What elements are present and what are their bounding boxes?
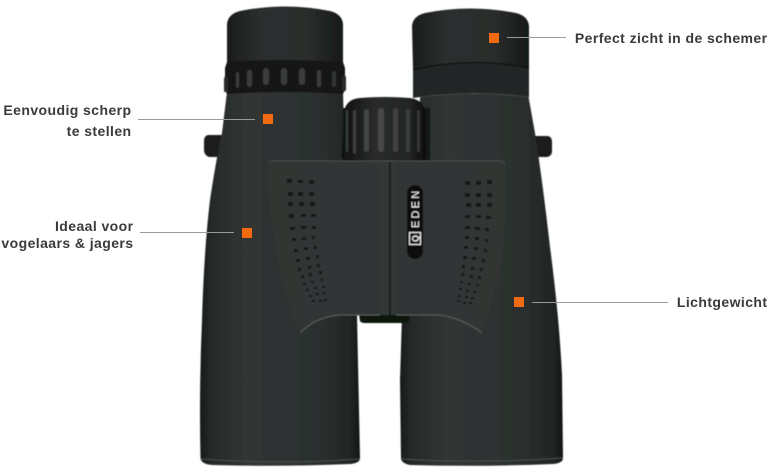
right eyecup	[412, 8, 529, 70]
callout: vogelaars en jagers: Ideaal voor	[55, 218, 134, 234]
left side knob	[204, 135, 226, 157]
callout: perfect zicht	[489, 30, 768, 46]
centre bridge	[268, 161, 505, 333]
EDEN badge	[407, 185, 423, 259]
callout: vogelaars en jagers: vogelaars & jagers	[1, 235, 134, 251]
focus ring	[224, 60, 346, 94]
focus wheel	[342, 97, 426, 162]
EDEN badge: EDEN	[410, 189, 422, 228]
marker	[489, 33, 499, 43]
callout: vogelaars en jagers	[1, 218, 252, 251]
right dot grille	[457, 180, 492, 304]
left eyecup	[227, 6, 343, 68]
right barrel	[400, 94, 563, 466]
left dot grille	[287, 179, 327, 302]
barrel bottom lips	[201, 458, 563, 462]
callout: scherp stellen: te stellen	[67, 123, 132, 139]
left barrel	[200, 92, 360, 466]
EDEN badge: Q	[410, 235, 420, 242]
callout: lichtgewicht	[514, 294, 768, 310]
right side knob	[530, 136, 552, 157]
bottom hinge	[359, 314, 410, 323]
binoculars	[200, 6, 563, 466]
callout: scherp stellen	[3, 102, 273, 139]
bridge centre seam	[389, 162, 391, 316]
callout: lichtgewicht: Lichtgewicht	[677, 294, 768, 310]
callout: scherp stellen: Eenvoudig scherp	[3, 102, 132, 118]
shadow behind focus wheel	[343, 108, 430, 165]
right eyecup collar	[413, 62, 529, 98]
callout: perfect zicht: Perfect zicht in de schemer	[575, 30, 768, 46]
